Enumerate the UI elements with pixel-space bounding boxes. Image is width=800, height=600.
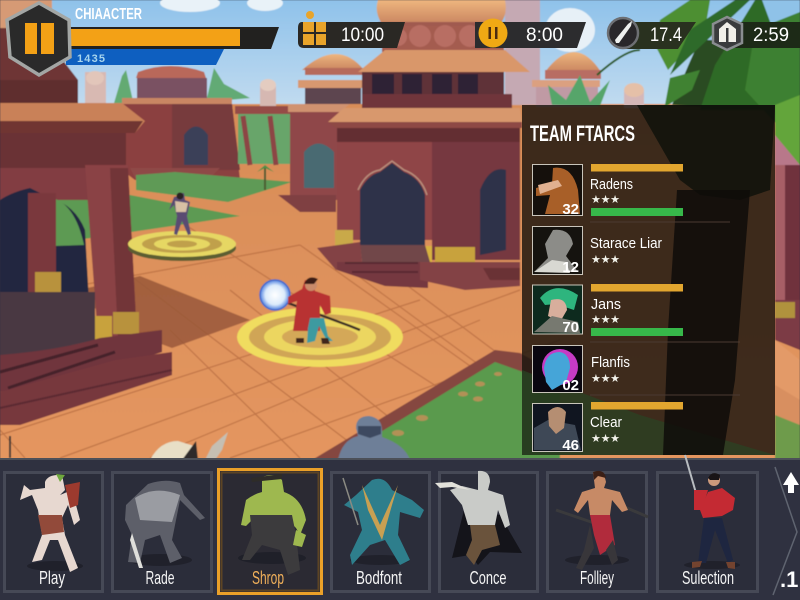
team row: Radens: ★★★ [591,194,620,206]
team row: Clear: ★★★ [591,433,620,445]
team row: Flanfis: 02 [562,377,579,394]
secondary tower [278,54,364,212]
icon: sword [608,18,638,48]
bottom character selection bar [0,455,800,600]
team row: Radens: 32 [562,201,579,218]
icon: up arrow [783,472,799,493]
team row: Jans [532,284,683,336]
card: Sulection: Sulection [682,568,734,588]
card: Play: Play [39,568,65,588]
timer: pause 8:00: 8:00 [526,25,563,46]
card: Rade: Rade [146,568,174,588]
team row: Starace Liar [532,226,662,276]
card: Play [4,472,102,592]
panel: team stats [522,105,775,455]
team row: Radens [532,164,683,218]
timer: gift 10:00: 10:00 [341,25,384,46]
player hero with staff [260,277,360,344]
card: Bodfont: Bodfont [356,568,402,588]
team row: Clear: 46 [562,437,579,454]
card: Shop (selected) [218,470,322,594]
pause button [7,3,70,75]
timer: gift 10:00 [298,11,405,48]
background platform and fighter [128,192,236,261]
main palace tower [317,0,540,290]
energy bar [66,49,224,65]
game scene background [0,0,800,460]
icon: coin pause [478,18,508,48]
foreground ally with spear [9,432,228,460]
distant palace [85,66,292,202]
foreground garden bed [312,350,560,460]
card: Sulection [658,455,758,592]
card: Shop (selected): Shrop [252,568,284,588]
player aura ring [237,307,403,367]
foreground grey warrior [338,416,410,460]
team row: Starace Liar: ★★★ [591,254,620,266]
card: Folliey: Folliey [580,568,614,588]
team row: Starace Liar: 12 [562,259,579,276]
character health HUD [7,3,279,75]
card: Rade [112,472,212,592]
palm tree [597,0,800,460]
character name: CHIAACTER [75,6,142,23]
timer: pause 8:00 [475,18,586,48]
team row: Radens: Radens [590,176,633,193]
heading: team stats: TEAM FTARCS [530,121,635,146]
small distant dome [532,52,644,108]
team row: Flanfis: ★★★ [591,373,620,385]
team row: Flanfis: Flanfis [591,354,630,371]
card: Bodfont [332,472,430,592]
health bar [68,27,279,49]
energy bar: 1435 [77,53,105,65]
left foreground pavilion [0,0,172,425]
team row: Jans: ★★★ [591,314,620,326]
stat: sword 17.4: 17.4 [650,25,682,46]
team row: Clear: Clear [590,414,622,431]
card: Conce [435,471,538,592]
team row: Clear [532,402,683,454]
team row: Jans: 70 [562,319,579,336]
card: Folliey [548,471,648,592]
stat: sword 17.4 [608,18,696,49]
team row: Starace Liar: Starace Liar [590,235,662,252]
team row: Jans: Jans [591,296,621,313]
team row: Flanfis [532,346,630,394]
icon: gift box [303,11,326,45]
chevron next arrow [773,467,797,595]
stat: shrine 2:59: 2:59 [753,25,789,46]
card: Conce: Conce [470,568,506,588]
icon: shrine [713,17,742,50]
left foreground garden [50,195,240,244]
stat: shrine 2:59 [713,17,800,50]
page number: .1 [780,567,798,592]
